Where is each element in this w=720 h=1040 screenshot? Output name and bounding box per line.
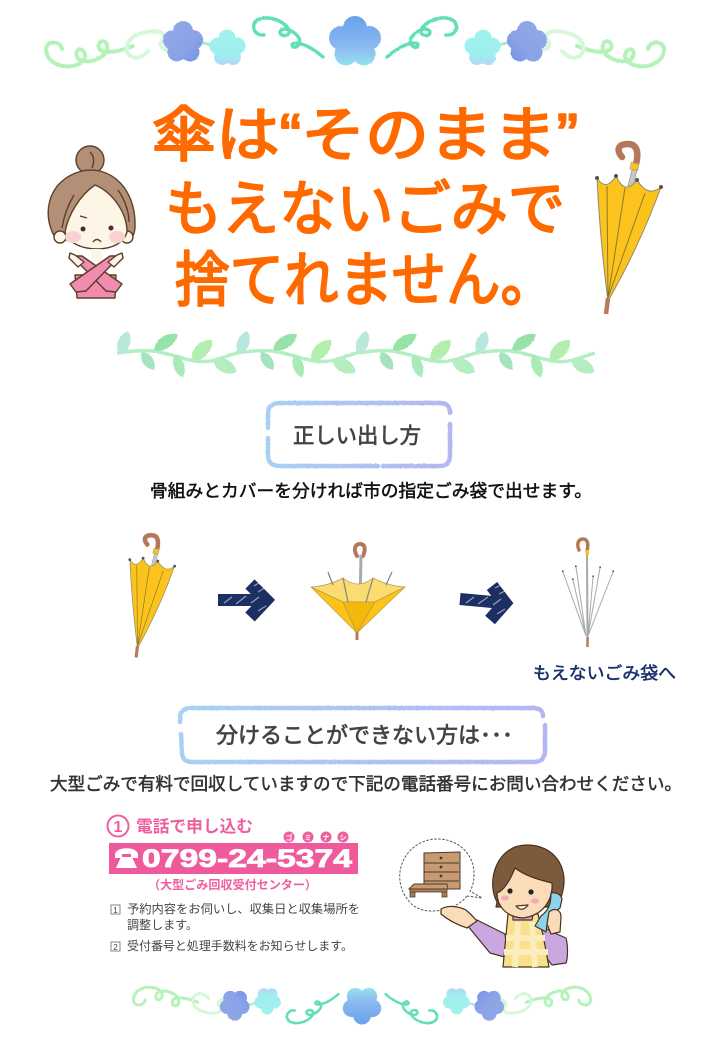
icon: step 1 closed umbrella xyxy=(128,535,176,658)
phone reading badges xyxy=(284,832,348,842)
instruction text: 骨組みとカバーを分ければ市の指定ごみ袋で出せます。 xyxy=(150,481,592,501)
step list: 予約内容をお伺いし、収集日と収集場所を xyxy=(127,902,360,916)
heading box: if you cannot separate: 分けることができない方は･･･ xyxy=(216,723,513,748)
phone reading badges: ナ xyxy=(322,834,330,842)
step number 1: 1 xyxy=(114,819,123,836)
phone reading badges: シ xyxy=(340,835,346,842)
icon: closed yellow umbrella xyxy=(595,144,663,314)
arrow: step 2 to 3 xyxy=(460,584,507,620)
caption: to non-burnable bag: もえないごみ袋へ xyxy=(533,664,676,683)
step list: 調整します。 xyxy=(127,918,198,932)
title xyxy=(152,102,578,314)
panel: phone application xyxy=(108,816,360,953)
bottom floral garland xyxy=(133,987,591,1024)
instruction: call the number below: 大型ごみで有料で回収していますので下記の電話番号にお問い合わせください。 xyxy=(50,774,682,794)
phone reading badges: ゴ xyxy=(286,833,292,842)
icon: thought bubble with furniture xyxy=(400,839,482,911)
arrow: step 1 to 2 xyxy=(218,581,266,617)
phone number band: 0799-24-5374 xyxy=(142,845,352,873)
heading box: correct disposal xyxy=(268,403,450,466)
step list: 2 xyxy=(113,943,118,952)
step list: 1 xyxy=(113,906,118,915)
step list: 受付番号と処理手数料をお知らせします。 xyxy=(127,939,353,953)
icon: woman on telephone xyxy=(441,845,568,967)
reception center name: （大型ごみ回収受付センター） xyxy=(148,877,317,892)
icon: step 2 opened umbrella xyxy=(311,544,405,640)
title: もえないごみで xyxy=(165,176,565,243)
phone number band xyxy=(109,843,358,874)
step heading: 電話で申し込む xyxy=(136,816,253,836)
phone reading badges: ミ xyxy=(304,835,312,842)
step list xyxy=(111,902,360,953)
title: 捨てれません。 xyxy=(175,247,555,314)
icon: woman crossing arms xyxy=(48,146,135,298)
title: 傘は“そのまま” xyxy=(152,102,578,169)
heading box: if you cannot separate xyxy=(180,708,545,762)
leaf vine divider xyxy=(114,329,598,379)
icon: step 3 separated frame xyxy=(562,539,614,647)
heading box: correct disposal: 正しい出し方 xyxy=(293,424,421,448)
step number 1 xyxy=(108,816,128,836)
top floral garland xyxy=(46,16,664,66)
